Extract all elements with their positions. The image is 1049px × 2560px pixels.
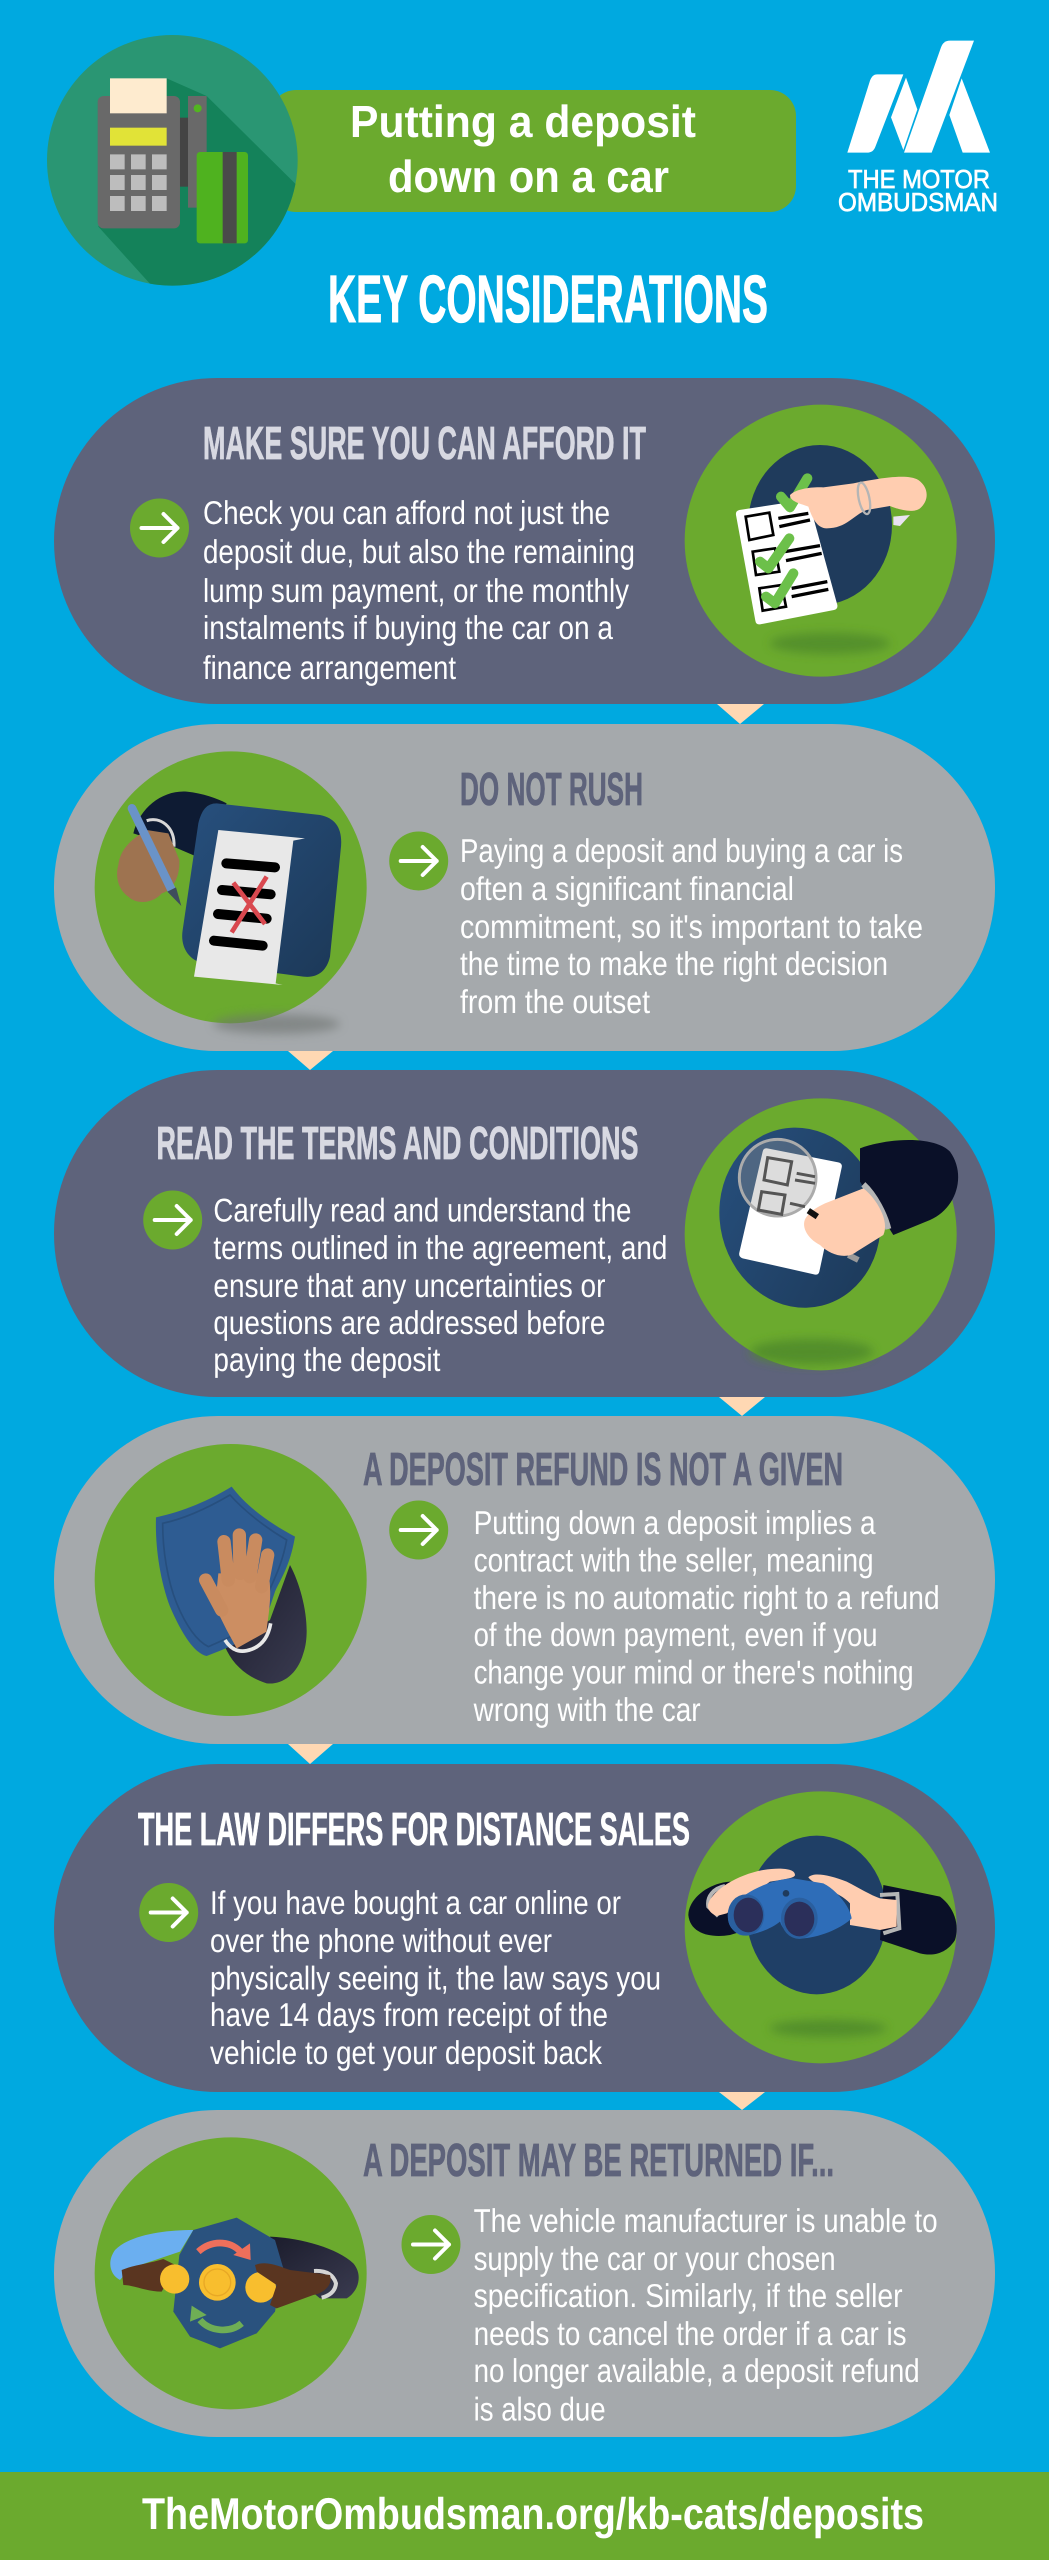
text: returned: The vehicle manufacturer is unable to xyxy=(474,2202,938,2239)
text: distance sales: over the phone without ever xyxy=(210,1922,552,1959)
text: terms: Carefully read and understand the xyxy=(213,1192,631,1228)
title banner: Putting a deposit xyxy=(350,96,696,147)
text: rush: commitment, so it's important to take xyxy=(460,908,923,945)
icon: hand on shield xyxy=(95,1444,367,1716)
text: rush: the time to make the right decision xyxy=(460,945,888,982)
icon: coin exchange xyxy=(95,2137,367,2409)
text: rush: from the outset xyxy=(460,983,650,1020)
arrow: step 3 to 4 xyxy=(719,1397,765,1416)
panel: a deposit refund is not a given xyxy=(54,1416,995,1744)
panel: the law differs for distance sales xyxy=(54,1764,995,2092)
text: returned: is also due xyxy=(474,2390,606,2428)
arrow: step 5 to 6 xyxy=(719,2092,765,2110)
icon: checklist xyxy=(685,405,957,677)
text: refund: contract with the seller, meaning xyxy=(474,1542,874,1578)
icon: arrow xyxy=(389,1500,448,1560)
text: distance sales: vehicle to get your deposit back xyxy=(210,2034,602,2071)
text: returned xyxy=(474,2202,938,2428)
text: refund: of the down payment, even if you xyxy=(474,1616,878,1653)
icon: magnifying glass xyxy=(685,1098,958,1370)
text: afford: finance arrangement xyxy=(203,649,456,686)
heading: afford: MAKE SURE YOU CAN AFFORD IT xyxy=(203,417,646,469)
logo: The Motor Ombudsman xyxy=(838,41,998,217)
arrow: step 2 to 3 xyxy=(288,1051,333,1070)
text: afford: deposit due, but also the remaining xyxy=(203,533,635,570)
panel: make sure you can afford it xyxy=(54,378,995,704)
text: returned: no longer available, a deposit refund xyxy=(474,2352,920,2389)
text: distance sales: have 14 days from receipt of the xyxy=(210,1996,608,2033)
text: rush: often a significant financial xyxy=(460,870,794,907)
text: refund: wrong with the car xyxy=(473,1691,701,1728)
icon: arrow xyxy=(402,2215,460,2274)
title banner xyxy=(270,90,796,212)
panel: do not rush xyxy=(54,724,995,1051)
heading: terms: READ THE TERMS AND CONDITIONS xyxy=(156,1117,638,1169)
text: terms: terms outlined in the agreement, and xyxy=(213,1229,667,1266)
icon: arrow xyxy=(143,1190,202,1250)
icon: arrow xyxy=(130,498,189,558)
text: rush xyxy=(460,832,923,1020)
heading: rush: DO NOT RUSH xyxy=(460,763,643,815)
text: refund: Putting down a deposit implies a xyxy=(474,1504,876,1541)
icon: arrow xyxy=(139,1883,198,1942)
text: terms: paying the deposit xyxy=(213,1341,440,1378)
icon: arrow xyxy=(389,832,448,890)
text: refund: change your mind or there's nothing xyxy=(474,1654,914,1690)
title banner: down on a car xyxy=(388,151,669,202)
text: afford: instalments if buying the car on a xyxy=(203,609,614,646)
arrow: step 4 to 5 xyxy=(288,1744,333,1764)
logo: The Motor Ombudsman: OMBUDSMAN xyxy=(838,187,998,217)
icon: binoculars xyxy=(685,1791,957,2063)
text: returned: needs to cancel the order if a car is xyxy=(474,2315,907,2352)
text: afford xyxy=(203,494,635,686)
panel: read the terms and conditions xyxy=(54,1070,995,1397)
text: afford: lump sum payment, or the monthly xyxy=(203,572,629,609)
text: terms: questions are addressed before xyxy=(213,1304,605,1341)
panel: a deposit may be returned if xyxy=(54,2110,995,2437)
footer link: TheMotorOmbudsman.org/kb-cats/deposits xyxy=(142,2490,924,2539)
text: refund xyxy=(473,1504,940,1728)
text: returned: specification. Similarly, if the seller xyxy=(474,2277,903,2314)
text: distance sales: physically seeing it, the law says you xyxy=(210,1960,661,1996)
arrow: step 1 to 2 xyxy=(717,704,764,724)
text: distance sales: If you have bought a car online or xyxy=(210,1884,621,1921)
footer band xyxy=(0,2472,1049,2560)
icon: card payment terminal xyxy=(47,35,303,297)
text: refund: there is no automatic right to a refund xyxy=(474,1579,940,1616)
text: terms xyxy=(213,1192,667,1378)
text: afford: Check you can afford not just the xyxy=(203,494,610,531)
text: terms: ensure that any uncertainties or xyxy=(213,1267,605,1304)
logo: The Motor Ombudsman: THE MOTOR xyxy=(848,164,990,194)
text: distance sales xyxy=(210,1884,661,2071)
text: returned: supply the car or your chosen xyxy=(474,2240,836,2277)
icon: signing document xyxy=(95,751,367,1034)
text: rush: Paying a deposit and buying a car is xyxy=(460,832,903,869)
